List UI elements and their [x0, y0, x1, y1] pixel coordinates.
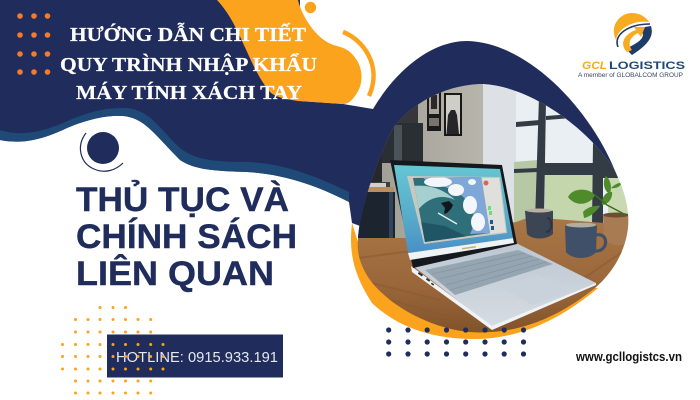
desk [358, 218, 628, 332]
shelf with books [358, 182, 395, 242]
logo wordmark [582, 60, 685, 72]
mug 2 [565, 222, 606, 258]
window frames [514, 97, 620, 226]
taskbar [462, 246, 476, 249]
main heading: LIÊN QUAN [76, 255, 274, 293]
mug 1 [525, 208, 553, 238]
plant [568, 176, 626, 218]
website url: www.gcllogistcs.vn [575, 349, 682, 364]
navy dots grid [386, 327, 526, 357]
title: MÁY TÍNH XÁCH TAY [76, 81, 302, 104]
photo: laptop on desk [358, 84, 628, 332]
logo wordmark: GCL [582, 60, 607, 72]
logo mark [614, 13, 652, 55]
tv [382, 123, 423, 163]
main heading: CHÍNH SÁCH [76, 218, 297, 256]
title: HƯỚNG DẪN CHI TIẾT [70, 21, 306, 46]
surfer [441, 201, 453, 214]
poster right [444, 93, 462, 136]
laptop screen [390, 160, 517, 268]
laptop base [411, 243, 596, 330]
right tool panel [482, 178, 506, 234]
orange crescent [351, 223, 598, 339]
window panes [516, 91, 617, 223]
hotline box: HOTLINE: 0915.933.191 [116, 349, 278, 366]
dark corner [396, 104, 418, 124]
logo [578, 13, 685, 79]
logo wordmark: LOGISTICS [609, 60, 685, 72]
main heading [76, 181, 297, 293]
logo tagline: A member of GLOBALCOM GROUP [578, 73, 683, 79]
navy wave header [0, 0, 618, 300]
hotline box [107, 334, 283, 378]
title: QUY TRÌNH NHẬP KHẨU [60, 52, 317, 76]
teal wave edge [0, 108, 349, 202]
orange arc [343, 32, 374, 96]
white column [483, 84, 516, 222]
orange dots halftone [61, 306, 164, 394]
wall [350, 80, 485, 240]
desk grain [359, 250, 622, 302]
orange circle [305, 2, 316, 13]
poster left [427, 90, 441, 131]
surf picture [413, 177, 490, 242]
main heading: THỦ TỤC VÀ [76, 181, 289, 219]
orange dots top left [17, 13, 50, 75]
app window [407, 176, 507, 244]
title [60, 21, 317, 104]
circle icon [80, 132, 123, 171]
orange blob top [217, 0, 362, 104]
plant pot [603, 212, 630, 245]
